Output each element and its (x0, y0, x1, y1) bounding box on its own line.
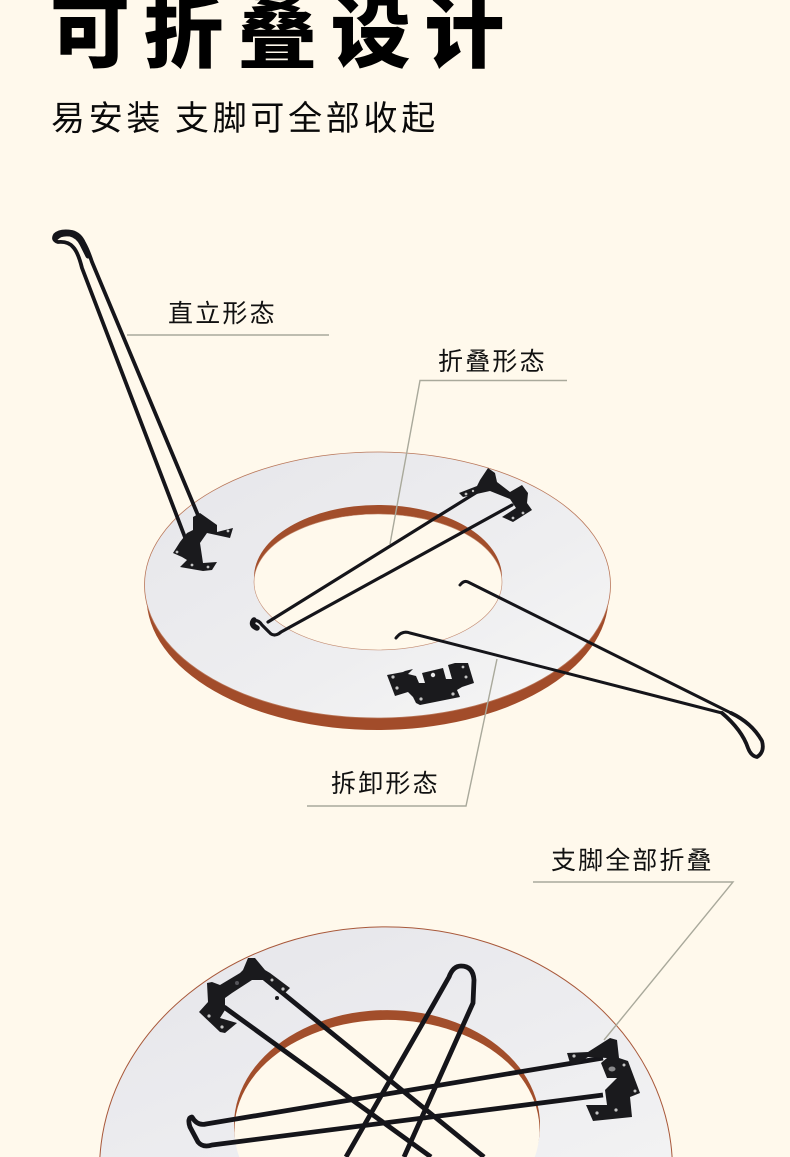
bracket hole (431, 673, 435, 677)
label: 直立形态: 直立形态 (168, 300, 277, 328)
folded leg brackets (459, 468, 532, 522)
folded leg (253, 484, 512, 635)
detached bracket (387, 663, 474, 705)
callout line: 拆卸形态 (307, 659, 497, 806)
upright leg brackets (173, 513, 233, 571)
bracket hole right (608, 1066, 616, 1072)
hairpin leg (346, 966, 474, 1157)
lower left brackets (199, 958, 290, 1033)
table hole lower (234, 1010, 540, 1157)
folded legs lower (189, 966, 603, 1157)
callout line: 直立形态 (127, 334, 329, 336)
table: upper ring with legs in three states (144, 452, 610, 730)
table top lower (100, 927, 672, 1157)
callout line: 折叠形态 (390, 380, 567, 544)
label: 拆卸形态: 拆卸形态 (331, 770, 440, 798)
diagonal leg pair (224, 973, 484, 1157)
table edge (146, 464, 608, 730)
label: 折叠形态: 折叠形态 (438, 348, 547, 376)
label: 支脚全部折叠: 支脚全部折叠 (551, 847, 714, 875)
table hole (254, 505, 502, 650)
callout line: 支脚全部折叠 (533, 882, 733, 1040)
bracket hole left (235, 981, 239, 985)
upright leg (54, 231, 200, 540)
horizontal leg pair (189, 1058, 603, 1146)
table top (144, 452, 610, 718)
table: lower ring with all legs folded (100, 927, 672, 1157)
detached legs (396, 581, 763, 757)
subtitle: 易安装 (51, 100, 164, 138)
subtitle: 支脚可全部收起 (175, 100, 439, 138)
lower right brackets (567, 1038, 640, 1121)
subtitle (51, 100, 439, 138)
